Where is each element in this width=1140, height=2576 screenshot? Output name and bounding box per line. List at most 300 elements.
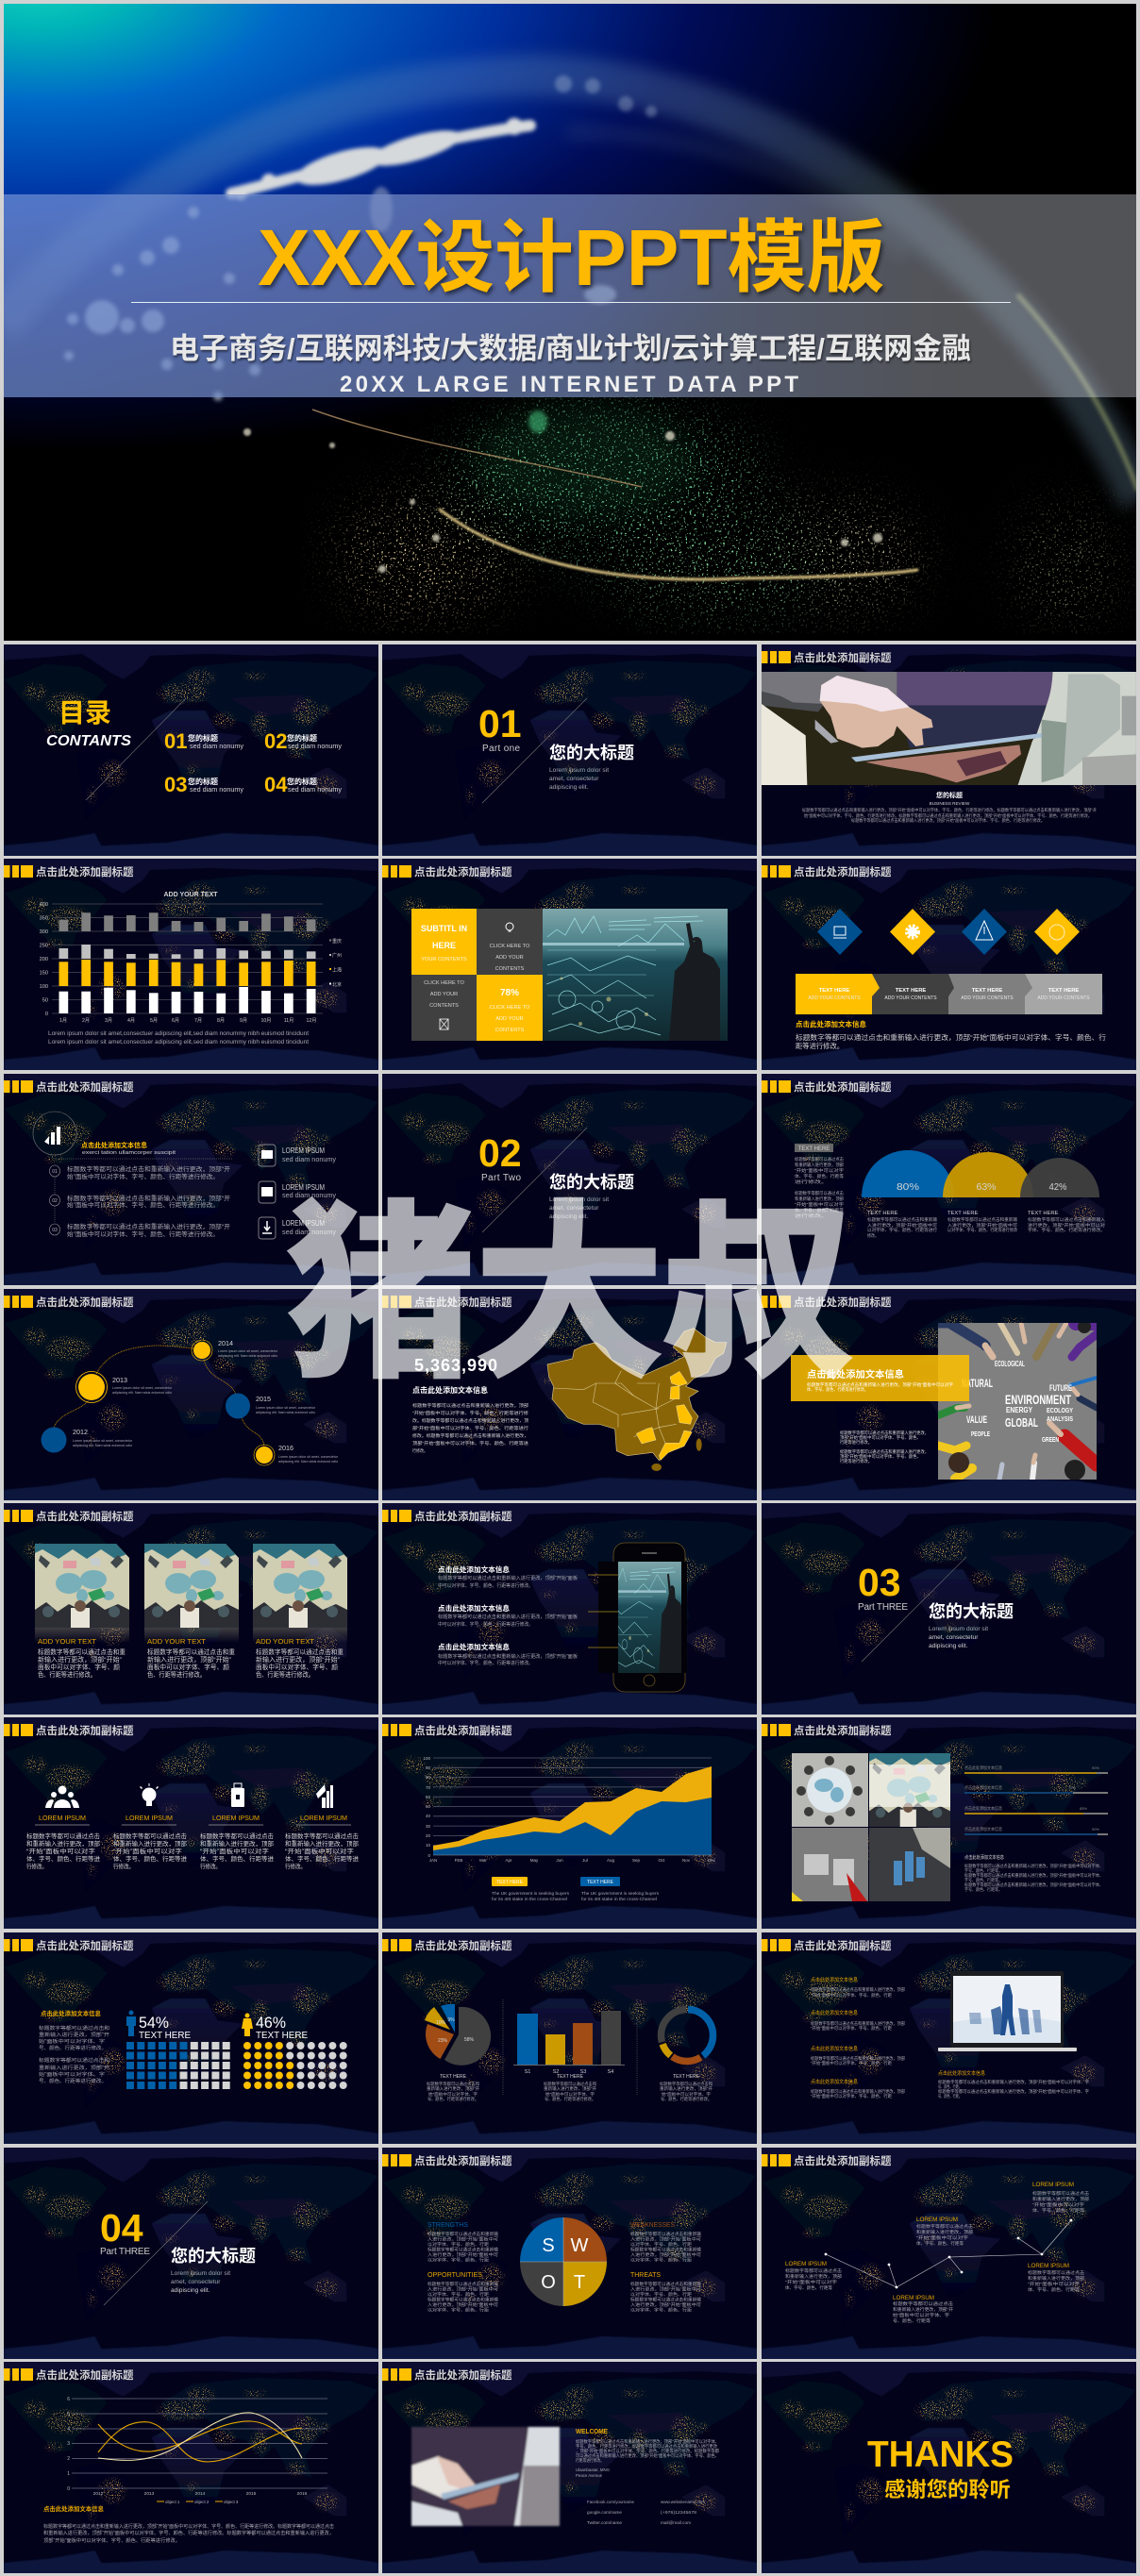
contact details: Twitter.com/name — [587, 2520, 623, 2525]
paragraph: 行修改。 — [412, 1447, 428, 1454]
column text: 标题数字等都可以通过点击 — [200, 1832, 274, 1840]
SWOT text: 以对字体、字号、颜色、行距 — [630, 2257, 692, 2263]
legend: 上海 — [332, 966, 342, 974]
header — [762, 1296, 892, 1309]
SWOT text: 标题数字等都可以通过点击和重新输 — [630, 2281, 701, 2287]
bar chart: S2 — [553, 2069, 559, 2075]
chevron steps: TEXT HERE — [819, 988, 849, 994]
slide: three picture columns: 面板中可以对字体、字号、颜 — [256, 1663, 338, 1671]
description: 标题数字等都可以通过点击和重新输入进行更改，顶部“开始”面板中可以对字体、字号、颜色、行距等进行修改。 — [851, 817, 1045, 824]
text list: 点击此处添加文本信息 — [811, 2045, 859, 2052]
contact details — [587, 2500, 705, 2525]
paragraph: 标题数字等都可以通过点击和重新输入进行更改，顶部 — [412, 1402, 528, 1409]
slide: numbered list with icons: exerci tation ullamcorper suscipit — [82, 1150, 176, 1156]
slide: three picture columns: 色、行距等进行修改。 — [256, 1670, 314, 1679]
pie chart: 23% — [438, 2038, 448, 2044]
contact details: google.com/name — [587, 2510, 623, 2515]
left text: 进行修改。 — [795, 1213, 828, 1219]
slide: percentage domes: 进行更改，顶部“开始”面板中可以对 — [1028, 1222, 1106, 1229]
SWOT wheel: O — [541, 2272, 556, 2293]
chart: 2012 — [93, 2491, 104, 2497]
tile: bulb: CONTENTS — [495, 966, 525, 972]
chart: 80 — [426, 1775, 430, 1780]
SWOT text: 以对字体、字号、颜色、行距 — [630, 2241, 692, 2248]
photo: word cloud: ENVIRONMENT — [1005, 1392, 1071, 1407]
body text — [576, 2438, 719, 2464]
header — [4, 1724, 134, 1737]
SWOT text: 以对字体、字号、颜色、行距 — [428, 2241, 489, 2248]
chart: 90 — [426, 1765, 430, 1770]
left text: 标题数字等都可以通过点击和 — [39, 2057, 109, 2064]
photo: word cloud: GREEN — [1042, 1437, 1059, 1444]
slide: part three: Lorem ipsum dolor sit — [929, 1626, 988, 1632]
chart: 100 — [423, 1756, 430, 1761]
column text: 行修改。 — [26, 1862, 47, 1870]
slide: numbered list with icons: 标题数字等都可以通过点击和重新输入进行更改，顶部“开 — [67, 1164, 231, 1173]
slide: SWOT — [379, 2145, 760, 2362]
notes — [964, 1854, 1103, 1893]
slide: part four: 04 — [100, 2206, 143, 2250]
text list: “开始”面板中可以对字体、字号、颜色、行距 — [811, 2025, 892, 2032]
contents items: 您的标题 — [188, 777, 218, 786]
contents items — [164, 729, 343, 796]
SWOT text: 标题数字等都可以通过点击和重新输 — [428, 2231, 498, 2237]
SWOT text: 入进行更改，顶部“开始”面板中可 — [428, 2236, 498, 2242]
chart circle icon — [33, 1112, 76, 1155]
slide: part four: adipiscing elit. — [171, 2287, 210, 2294]
column text: 标题数字等都可以通过点击 — [26, 1832, 100, 1840]
slide: percentage domes: 字体、字号、颜色、行距等进行修改。 — [1028, 1227, 1105, 1233]
slide: constellation map: 体、字号、颜色、行距等 — [785, 2284, 832, 2291]
header — [762, 865, 892, 878]
column labels: LOREM IPSUM — [212, 1815, 260, 1822]
header: 点击此处添加副标题 — [36, 1510, 134, 1523]
header: 点击此处添加副标题 — [794, 1939, 892, 1952]
column text: 体、字号、颜色、行距等进 — [26, 1854, 100, 1863]
photo: word cloud: ECOLOGY — [1047, 1406, 1073, 1414]
column labels: LOREM IPSUM — [300, 1815, 347, 1822]
text list: 点击此处添加文本信息 — [811, 2009, 859, 2016]
pictures — [35, 1544, 347, 1643]
body text: ，顶部“开始”面板中可以对字体、字号、颜色、行距等进行修改。标题数字等都 — [576, 2448, 719, 2454]
progress bars — [964, 1765, 1108, 1835]
subtitle: 电子商务/互联网科技/大数据/商业计划/云计算工程/互联网金融 — [170, 332, 971, 365]
left text: 和重新输入进行更改，顶部 — [795, 1196, 844, 1202]
header: 点击此处添加副标题 — [36, 1724, 134, 1737]
pie chart: 9% — [447, 2017, 455, 2023]
chart: 2 — [67, 2456, 70, 2462]
header: 点击此处添加副标题 — [794, 865, 892, 878]
timeline labels: 2015 — [256, 1395, 271, 1403]
bar chart: S4 — [608, 2069, 613, 2075]
chevron steps: TEXT HERE — [896, 988, 926, 994]
body text: 字号、颜色、行距等进行修改。标题数字等都可以通过点击和重新输入进行更改 — [576, 2443, 717, 2450]
pie chart — [425, 2004, 491, 2066]
paragraph — [412, 1402, 528, 1454]
SWOT text: 以对字体、字号、颜色、行距 — [428, 2291, 489, 2298]
header: 点击此处添加副标题 — [36, 1080, 134, 1094]
slide: contents: 目录 — [59, 698, 111, 728]
slide: constellation map: “开始”面板中可以对字 — [1028, 2281, 1080, 2287]
photo: word cloud: ANALYSIS — [1047, 1416, 1073, 1423]
header — [762, 1724, 892, 1737]
translucent title band — [4, 194, 1136, 397]
chart — [40, 902, 323, 1024]
photo: word cloud — [938, 1320, 1097, 1480]
lower text — [840, 1430, 929, 1464]
left text: 体、字号、颜色、行距等 — [795, 1207, 844, 1213]
slide: percentage domes: 入进行更改，顶部“开始”面板中可 — [867, 1222, 938, 1229]
column text: 和重新输入进行更改，顶部 — [200, 1839, 274, 1848]
header: 点击此处添加副标题 — [36, 1296, 134, 1309]
SWOT text: 入进行更改，顶部“开始”面板中可 — [630, 2301, 701, 2308]
slide: constellation map: 和重新输入进行更改，顶部 — [1028, 2275, 1084, 2282]
captions — [867, 1211, 1059, 1216]
right note — [938, 2069, 1089, 2099]
slide: area chart: for its 40t stake in the cross-Channel — [581, 1897, 657, 1901]
slide: environment word cloud — [759, 1286, 1139, 1503]
slide: part three: amet, consectetur — [929, 1634, 979, 1641]
notes: 字号、颜色、行距等。 — [964, 1877, 1002, 1883]
header — [4, 2368, 134, 2382]
right icon list: sed diam nonumy — [282, 1157, 337, 1163]
slide: constellation map: “开始”面板中可以对字 — [1032, 2201, 1084, 2208]
female stat — [242, 2014, 308, 2041]
slide: part one: 您的大标题 — [549, 744, 634, 762]
chart: Dec — [708, 1858, 716, 1863]
chart: 30 — [426, 1824, 430, 1829]
slide: numbered list with icons: 03 — [52, 1228, 58, 1233]
slide: constellation map: 体、字号、颜色、行距等 — [1032, 2207, 1084, 2214]
slide: part two: adipiscing elit. — [549, 1213, 589, 1220]
chart captions — [440, 2074, 700, 2080]
captions: TEXT HERE — [1028, 1211, 1059, 1216]
progress bars: 75% — [1068, 1785, 1076, 1790]
dome chart: 63% — [976, 1182, 997, 1193]
tile: 78%: ADD YOUR — [495, 1016, 524, 1022]
constellation labels: LOREM IPSUM — [785, 2262, 827, 2267]
SWOT text: 以对字体、字号、颜色、行距 — [630, 2306, 692, 2314]
tile: bulb: CLICK HERE TO — [490, 944, 530, 949]
dot grid — [243, 2042, 347, 2089]
chart: 50 — [42, 998, 48, 1004]
chart: Apr — [505, 1858, 512, 1863]
right icon list: sed diam nonumy — [282, 1229, 337, 1236]
slide: part three: Part THREE — [858, 1602, 908, 1613]
column text: “开始”面板中可以对字 — [113, 1847, 183, 1855]
contact details: www.websitename.com — [661, 2500, 705, 2504]
slide: three picture columns: 色、行距等进行修改。 — [38, 1670, 96, 1679]
header — [762, 651, 892, 664]
left text: 和重新输入进行更改，顶部 — [795, 1162, 844, 1168]
chevron steps: ADD YOUR CONTENTS — [808, 995, 861, 1001]
slide: part one: 01 — [478, 702, 522, 745]
chevron steps: TEXT HERE — [1048, 988, 1079, 994]
phone notes: 标题数字等都可以通过点击和重新输入进行更改，顶部“开始”面板 — [438, 1653, 578, 1660]
chart: 350 — [40, 915, 48, 921]
slide: percentage domes: 标题数字等都可以通过点击和重新输 — [867, 1216, 938, 1223]
slide: area chart — [379, 1715, 760, 1932]
left text: 重新输入进行更改，顶部“开 — [39, 2065, 109, 2071]
chart: 4 — [67, 2427, 70, 2433]
header: 点击此处添加副标题 — [36, 1939, 134, 1952]
phone — [598, 1543, 687, 1692]
slide: part two: 您的大标题 — [549, 1173, 634, 1192]
chart: 50 — [426, 1804, 430, 1809]
chart — [67, 2397, 327, 2504]
slide: numbered list with icons: 01 — [52, 1169, 58, 1175]
text list: “开始”面板中可以对字体、字号、颜色、行距 — [811, 2093, 892, 2099]
paragraph — [43, 2522, 334, 2544]
SWOT text: 标题数字等都可以通过点击和重新输 — [428, 2297, 498, 2302]
SWOT text: 入进行更改，顶部“开始”面板中可 — [428, 2301, 498, 2308]
night lights — [340, 406, 1114, 623]
column text — [26, 1832, 359, 1870]
text list: “开始”面板中可以对字体、字号、颜色、行距 — [811, 1992, 892, 1999]
slide: percentage domes: 修改。 — [867, 1232, 879, 1239]
phone notes — [438, 1564, 578, 1666]
slide: percentage domes: 以对字体、字号、颜色、行距等进行修改 — [947, 1227, 1017, 1233]
slide: numbered list with icons — [1, 1071, 381, 1288]
chart: 3月 — [105, 1017, 112, 1024]
chevron steps — [796, 974, 1102, 1014]
progress bars: 点击此处添加文本信息 — [964, 1765, 1002, 1771]
slide: pie, bars and donut: 重新输入进行更改，顶部“开 — [427, 2085, 480, 2092]
left text: “开始”面板中可以对字 — [795, 1201, 844, 1208]
phone notes: 标题数字等都可以通过点击和重新输入进行更改，顶部“开始”面板 — [438, 1614, 578, 1620]
text list: 点击此处添加文本信息 — [811, 1976, 859, 1983]
chart: Mar — [479, 1858, 487, 1863]
chart: object 3 — [224, 2500, 239, 2504]
chart: 70 — [426, 1785, 430, 1790]
slide: constellation map: “开始”面板中可以对字 — [916, 2234, 968, 2241]
column text: “开始”面板中可以对字 — [200, 1847, 270, 1855]
text list: 标题数字等都可以通过点击和重新输入进行更改，顶部 — [811, 1986, 905, 1993]
dome chart: 42% — [1049, 1182, 1067, 1193]
slide: stacked bar chart — [1, 856, 381, 1073]
female stat: TEXT HERE — [256, 2031, 308, 2041]
slide: constellation map: 标题数字等都可以通过点击 — [1028, 2269, 1084, 2276]
square grid — [126, 2042, 230, 2089]
slide: constellation map: 号、颜色、行距等 — [893, 2317, 930, 2324]
bar chart — [513, 2011, 625, 2075]
right note: 号、颜色、行距。 — [938, 2093, 962, 2099]
slide: pie, bars and donut: 重新输入进行更改，顶部“开 — [544, 2085, 597, 2092]
contents items: 03 — [164, 773, 187, 796]
female stat: 46% — [256, 2014, 286, 2032]
slide: thanks — [759, 2359, 1139, 2576]
tile: 78% — [477, 975, 543, 1041]
SWOT labels — [428, 2222, 675, 2279]
column labels: LOREM IPSUM — [39, 1815, 86, 1822]
text list: 标题数字等都可以通过点击和重新输入进行更改，顶部 — [811, 2020, 905, 2027]
chart: 40 — [426, 1814, 430, 1818]
slide: part four — [1, 2145, 381, 2362]
notes: 标题数字等都可以通过点击和重新输入进行更改，顶部“开始”面板中可以对字体、 — [964, 1872, 1103, 1879]
right icon list: sed diam nonumy — [282, 1193, 337, 1199]
slide: part two — [379, 1071, 760, 1288]
header — [382, 2368, 512, 2382]
contact details: (+976)12345678 — [661, 2510, 697, 2515]
tile: click: ADD YOUR — [430, 992, 458, 997]
chart: 5 — [67, 2412, 70, 2417]
contents items: 您的标题 — [287, 777, 317, 786]
header: 点击此处添加副标题 — [36, 2368, 134, 2382]
header — [4, 1939, 134, 1952]
chart: 2月 — [82, 1017, 90, 1024]
progress bars: 点击此处添加文本信息 — [964, 1784, 1002, 1791]
SWOT text: 入进行更改，顶部“开始”面板中可 — [630, 2236, 701, 2242]
tile: bulb: ADD YOUR — [495, 955, 524, 961]
header: 点击此处添加副标题 — [36, 865, 134, 878]
chevron steps: ADD YOUR CONTENTS — [884, 995, 937, 1001]
header: 点击此处添加副标题 — [794, 1080, 892, 1094]
contents items: sed diam nonumy — [190, 787, 244, 794]
slide: constellation map: 和重新输入进行更改，顶部 — [1032, 2196, 1089, 2202]
slide: pie, bars and donut: 号、颜色、行距等进行修改。 — [545, 2096, 595, 2102]
chart: 5月 — [150, 1017, 158, 1024]
phone notes: 点击此处添加文本信息 — [438, 1642, 511, 1651]
text list: 标题数字等都可以通过点击和重新输入进行更改，顶部 — [811, 2088, 905, 2095]
description — [802, 807, 1098, 824]
tile: 78%: CONTENTS — [495, 1028, 525, 1033]
slide: timeline circles — [1, 1286, 381, 1503]
progress bars: 90% — [1092, 1765, 1099, 1770]
timeline labels: 2012 — [73, 1428, 88, 1436]
slide: diamonds and chevrons — [759, 856, 1139, 1073]
slide: part three — [759, 1500, 1139, 1717]
header: 点击此处添加副标题 — [794, 1296, 892, 1309]
SWOT labels: THREATS — [630, 2272, 661, 2279]
slide: pie, bars and donut: 始”面板中可以对字体、字 — [428, 2091, 478, 2098]
slide: pie, bars and donut: 号、颜色、行距等进行修改。 — [428, 2096, 478, 2102]
legend: 北京 — [332, 981, 342, 988]
header: 点击此处添加副标题 — [414, 1296, 512, 1309]
chart: 2013 — [144, 2491, 155, 2497]
pie chart: 10% — [436, 2020, 446, 2026]
slide: china map: 5,363,990 — [414, 1356, 497, 1375]
slide: tablet photo intro: 您的标题 — [936, 791, 963, 799]
contact details: mail@mail.com — [661, 2520, 691, 2525]
SWOT text: 标题数字等都可以通过点击和重新输 — [428, 2246, 498, 2253]
bright cloud — [231, 118, 530, 232]
chart: Oct — [658, 1858, 665, 1863]
left text: 始”面板中可以对字体、字 — [39, 2071, 105, 2078]
SWOT text: 标题数字等都可以通过点击和重新输 — [630, 2231, 701, 2237]
slide: welcome contact: Peace Avenue — [576, 2473, 603, 2478]
slide: tablet photo intro — [759, 642, 1139, 859]
chart: 400 — [40, 902, 48, 908]
photo: word cloud: PEOPLE — [971, 1431, 990, 1438]
captions: ADD YOUR TEXT — [147, 1639, 207, 1646]
lower text: 行距等进行修改。 — [840, 1439, 872, 1446]
paragraph: 顶部“开始”面板中可以对字体、字号、颜色、行距等进行修改。 — [43, 2536, 180, 2544]
header: 点击此处添加副标题 — [794, 651, 892, 664]
legend: 重庆 — [332, 938, 342, 945]
left text: 体、字号、颜色、行距等 — [795, 1173, 844, 1179]
header: 点击此处添加副标题 — [794, 1724, 892, 1737]
chart: 100 — [40, 984, 48, 990]
slide: timeline circles: adipiscing elit. Nam wisis euismod odio — [278, 1459, 339, 1464]
slide: part two: 02 — [478, 1131, 522, 1175]
slide: part three: 您的大标题 — [929, 1602, 1014, 1621]
paragraph: 顶部“开始”面板中可以对字体、字号、颜色、行距等进 — [412, 1440, 528, 1447]
column labels: LOREM IPSUM — [126, 1815, 173, 1822]
paragraph: 修改。标题数字等都可以通过点击和重新输入进行更改， — [412, 1432, 528, 1439]
english subtitle: 20XX LARGE INTERNET DATA PPT — [340, 372, 798, 397]
captions — [38, 1639, 315, 1646]
column text: 行修改。 — [200, 1862, 221, 1870]
slide: stacked bar chart: ADD YOUR TEXT — [163, 892, 218, 898]
SWOT text: 入进行更改，顶部“开始”面板中可 — [428, 2251, 498, 2258]
contents items: sed diam nonumy — [288, 787, 343, 794]
captions: TEXT HERE — [867, 1211, 898, 1216]
phone notes: 中可以对字体、字号、颜色、行距等进行修改。 — [438, 1582, 533, 1589]
progress bars: 85% — [1080, 1806, 1087, 1811]
left text — [795, 1156, 844, 1219]
header — [4, 865, 134, 878]
slide: part one: amet, consectetur — [549, 776, 599, 782]
right icon list: LOREM IPSUM — [282, 1146, 325, 1155]
chart: 11月 — [284, 1017, 293, 1024]
tile: click — [411, 975, 477, 1041]
body text: 行距等进行修改。 — [576, 2457, 604, 2464]
slide: constellation map: 标题数字等都可以通过点击 — [785, 2267, 842, 2274]
slide: part one: Lorem ipsum dolor sit — [549, 767, 609, 774]
contents items: sed diam nonumy — [288, 744, 343, 750]
left text: 标题数字等都可以通过点击和 — [39, 2025, 109, 2032]
photo: word cloud: GLOBAL — [1005, 1415, 1038, 1430]
chart: 10 — [426, 1843, 430, 1848]
header: 点击此处添加副标题 — [414, 2154, 512, 2167]
left text: 进行修改。 — [795, 1179, 828, 1185]
phone notes: 中可以对字体、字号、颜色、行距等进行修改。 — [438, 1621, 533, 1628]
chart: 2016 — [297, 2491, 308, 2497]
phone notes: 点击此处添加文本信息 — [438, 1603, 511, 1613]
paragraph: 改。标题数字等都可以通过点击和重新输入进行更改，顶 — [412, 1417, 528, 1424]
yellow callout: 体、字号、颜色、行距等进行修改。 — [807, 1386, 868, 1393]
paragraph: 部“开始”面板中可以对字体、字号、颜色、行距等进行 — [412, 1425, 528, 1431]
slide: thanks: 感谢您的聆听 — [884, 2478, 1011, 2501]
slide: part two: Part Two — [481, 1173, 521, 1183]
dome chart: 80% — [897, 1182, 919, 1193]
description: 标题数字等都可以通过点击和重新输入进行更改，顶部“开始”面板中可以对字体、字号、颜色、行距等进行修改。标题数字等都可以通过点击和重新输入进行更改，顶部“开 — [802, 807, 1098, 813]
chart: 300 — [40, 929, 48, 935]
slide: pie, bars and donut — [379, 1930, 760, 2147]
chart: 10月 — [261, 1017, 271, 1024]
column text: 体、字号、颜色、行距等进 — [200, 1854, 274, 1863]
tile: subtitle: HERE — [432, 941, 456, 950]
chart: 7月 — [194, 1017, 202, 1024]
SWOT text: 入进行更改，顶部“开始”面板中可 — [630, 2251, 701, 2258]
slide: phone mockup — [379, 1500, 760, 1717]
column labels — [39, 1815, 347, 1822]
slide: timeline circles: Lorem ipsum dolor sit amet, consectetur — [278, 1454, 339, 1459]
chart: object 2 — [194, 2500, 210, 2504]
captions: ADD YOUR TEXT — [256, 1639, 315, 1646]
chart — [423, 1756, 716, 1863]
slide: welcome contact: Ulaanbaatar, MNG — [576, 2467, 610, 2472]
yellow callout: 点击此处添加文本信息 — [807, 1368, 904, 1380]
contents items: sed diam nonumy — [190, 744, 244, 750]
chart: 2015 — [246, 2491, 257, 2497]
slide: pie, bars and donut: 标题数字等都可以通过点击和 — [660, 2081, 712, 2087]
constellation labels: LOREM IPSUM — [1032, 2183, 1074, 2188]
header: 点击此处添加副标题 — [414, 2368, 512, 2382]
paragraph: 标题数字等都可以通过点击和重新输入进行更改，顶部“开始”面板中可以对字体、字号、颜色、行距等进行修改。标题数字等都可以通过点击 — [43, 2522, 334, 2530]
right note: 标题数字等都可以通过点击和重新输入进行更改，顶部“开始”面板中可以对字体、字 — [938, 2079, 1089, 2085]
donut chart — [661, 2010, 713, 2061]
